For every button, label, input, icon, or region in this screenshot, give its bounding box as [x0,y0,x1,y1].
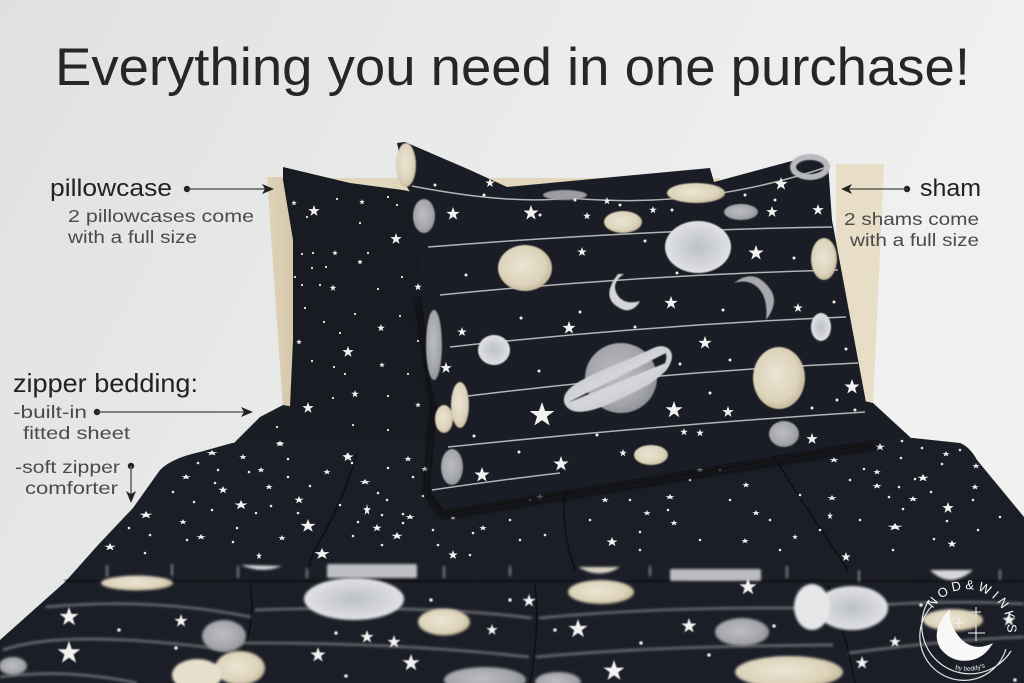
soft zipper comforter text: comforter [25,478,118,498]
comforter body [0,438,1024,683]
arrow: soft zipper comforter [126,463,136,503]
comforter seams [230,450,855,683]
logo sparkles [954,607,985,641]
lower comforter planets [0,576,983,683]
pillowcase description: 2 pillowcases come [68,206,254,226]
comforter fold band pattern [107,564,1000,582]
top corner ring [793,157,827,177]
lower comforter stars [58,578,1016,680]
lower comforter lines [0,602,1024,683]
soft zipper comforter text [15,457,120,498]
logo wordmark: NOD&WINKS [926,580,1016,632]
arrow: built-in fitted sheet [94,407,253,417]
label: zipper bedding [13,368,198,498]
logo tagline: by beddy's [955,664,985,672]
saturn planet [566,343,669,413]
sham stars [435,177,860,481]
logo: Nod and Winks badge [919,580,1016,681]
sham description: 2 shams come [844,209,979,229]
label: sham: sham [920,175,981,202]
soft zipper comforter text: -soft zipper [15,457,120,477]
sham description: with a full size [849,230,979,250]
sham [396,142,876,514]
fitted sheet and zipper comforter [0,400,1024,683]
arrow: sham [841,184,910,194]
built-in fitted sheet text [13,402,130,443]
label: sham [844,175,981,250]
crescent moons [609,274,640,310]
sham lines [412,166,865,490]
logo crescent moon [937,609,993,661]
pillowcase stars [277,197,418,430]
label: zipper bedding: zipper bedding: [13,368,198,398]
built-in fitted sheet text: fitted sheet [23,423,130,443]
built-in fitted sheet text: -built-in [13,402,87,422]
sham description [844,209,979,250]
sham planets [396,143,837,485]
pillowcase [276,167,470,458]
comforter stars [104,441,1000,561]
pillowcase description: with a full size [67,227,197,247]
arrow: pillowcase [184,184,274,194]
sham cast shadow [420,300,876,514]
label: pillowcase [50,175,254,247]
title: Everything you need in one purchase! [55,38,970,97]
pillowcase description [67,206,254,247]
fitted sheet [230,400,940,470]
label: pillowcase: pillowcase [50,175,172,202]
headboard [267,164,884,410]
